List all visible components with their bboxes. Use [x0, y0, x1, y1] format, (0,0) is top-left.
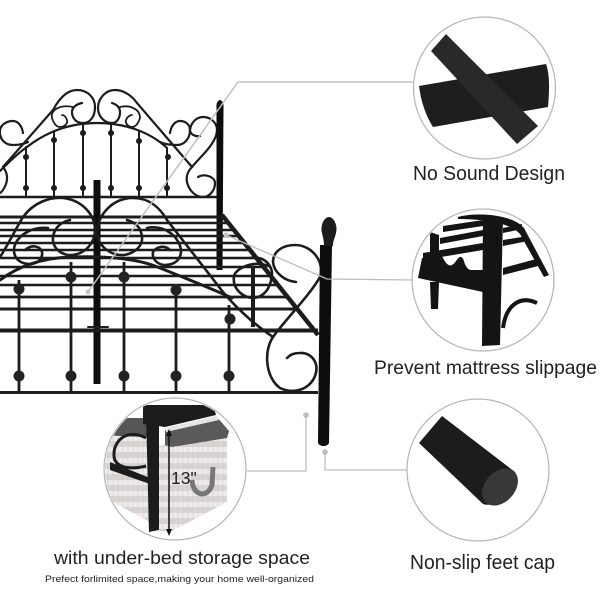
- panel: under-bed storage: [45, 398, 314, 585]
- height label: 13": [171, 468, 197, 488]
- callout line: storage: [247, 415, 306, 471]
- footboard bars: [19, 262, 229, 391]
- callout line: feet cap: [325, 452, 407, 470]
- footboard scrolls: [0, 198, 321, 391]
- caption: with under-bed storage space: [53, 547, 310, 568]
- circle frame: [412, 209, 554, 351]
- head post: [216, 100, 224, 270]
- side rail: [222, 215, 318, 335]
- headboard ball ornaments: [23, 130, 171, 191]
- circle frame: [414, 17, 556, 159]
- post finial: [321, 217, 337, 246]
- bed corner detail: [418, 214, 549, 346]
- panel: non-slip feet cap: [407, 399, 555, 574]
- callout dot: sound: [86, 290, 90, 294]
- footboard balls: [14, 272, 236, 382]
- callout line: sound: [88, 82, 415, 292]
- panel: no sound design: [413, 17, 565, 185]
- foot cap body: [419, 416, 517, 505]
- center post: [94, 180, 100, 384]
- rubber sleeve diagonal: [431, 34, 538, 144]
- callout dot: feet cap: [322, 449, 328, 455]
- footboard rails: [0, 328, 318, 332]
- bed frame illustration: [0, 90, 337, 446]
- caption: Prevent mattress slippage: [374, 357, 597, 379]
- caption: No Sound Design: [413, 163, 565, 185]
- storage box photo: [105, 405, 229, 536]
- caption: Non-slip feet cap: [410, 552, 555, 574]
- callout dot: storage: [303, 412, 309, 418]
- panel: prevent mattress slippage: [374, 209, 597, 379]
- rubber sleeve horizontal: [419, 64, 549, 127]
- foot cap end face: [475, 461, 525, 513]
- mattress slats: [0, 217, 297, 309]
- foot post: [318, 245, 332, 446]
- headboard: [0, 90, 217, 197]
- circle frame: [104, 398, 246, 540]
- callout line: slippage: [226, 235, 412, 280]
- sub caption: Prefect forlimited space,making your home well-organized: [45, 574, 314, 585]
- circle frame: [407, 399, 549, 541]
- callout dot: slippage: [224, 232, 228, 238]
